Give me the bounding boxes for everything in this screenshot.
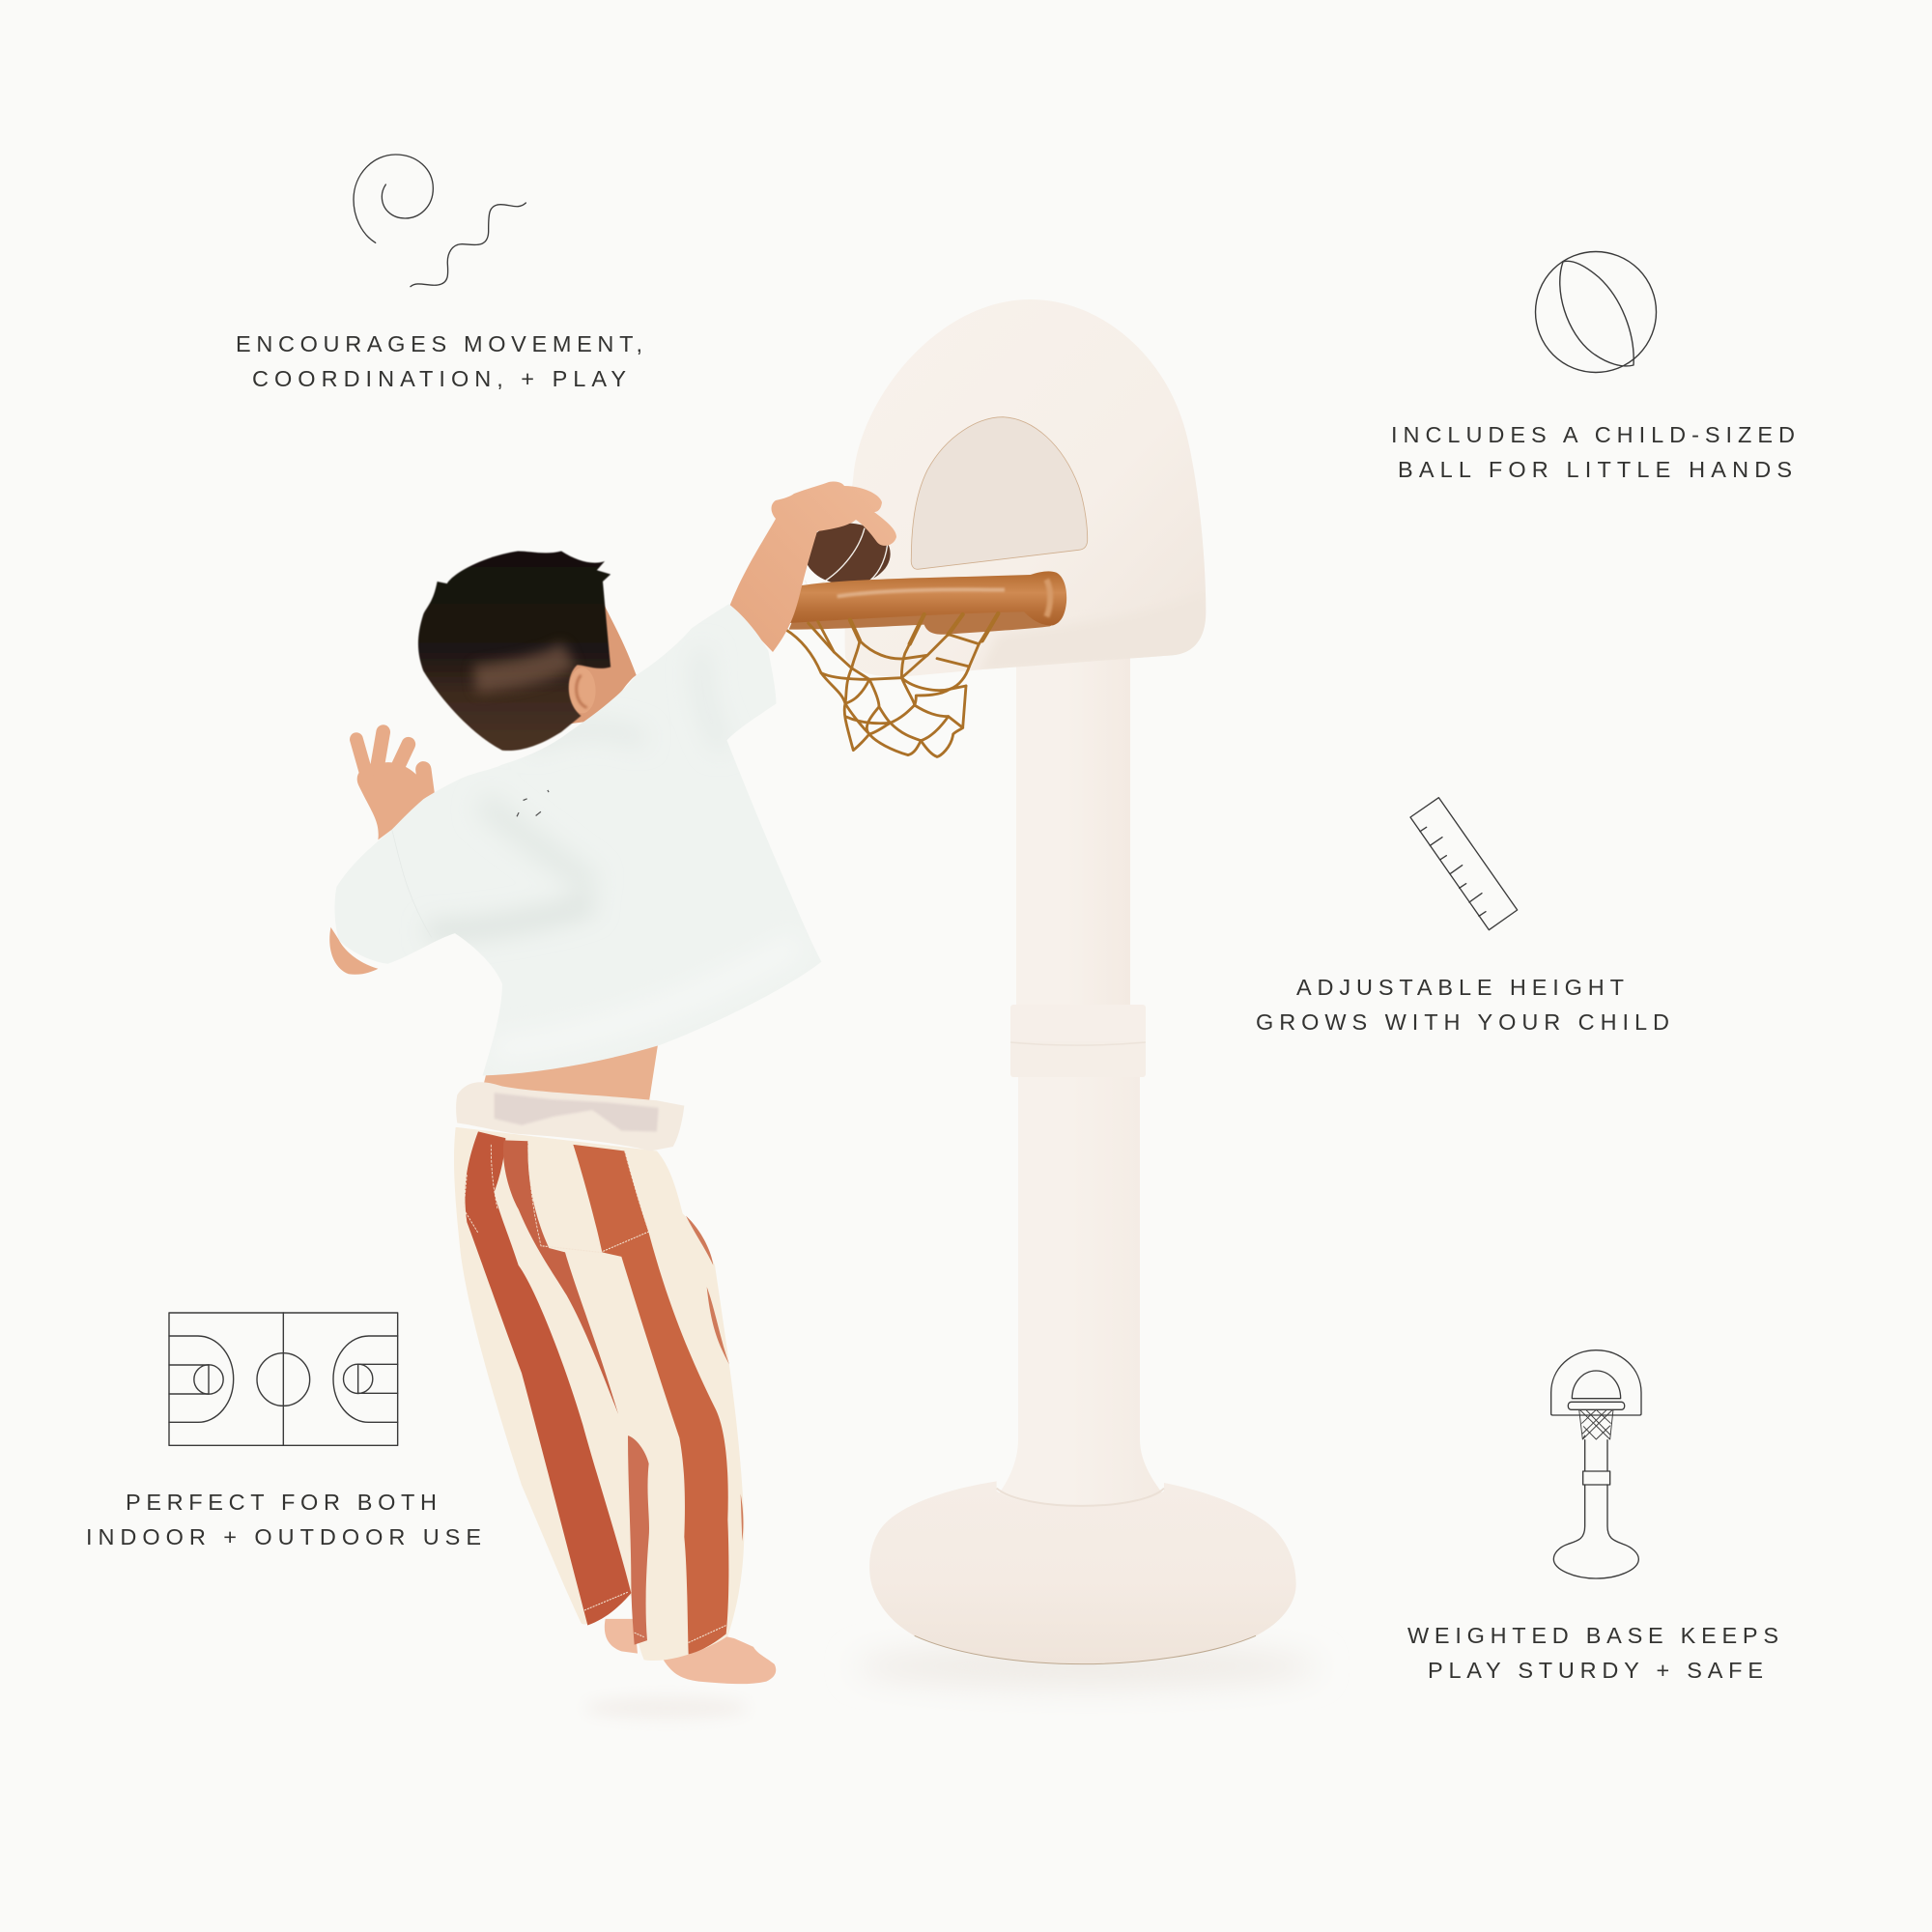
caption (1256, 975, 1669, 1035)
rim (789, 571, 1066, 635)
product: basketball hoop stand (785, 299, 1296, 1664)
icon: ruler (1410, 798, 1518, 930)
caption: COORDINATION, + PLAY (252, 366, 626, 391)
feature: court icon and caption (86, 1313, 481, 1549)
feature: movement squiggle icon and caption (236, 155, 642, 391)
icon: spiral and squiggle (354, 155, 526, 287)
caption: BALL FOR LITTLE HANDS (1398, 457, 1792, 482)
caption: ADJUSTABLE HEIGHT (1296, 975, 1624, 1000)
caption (86, 1490, 481, 1549)
caption: PLAY STURDY + SAFE (1428, 1658, 1763, 1683)
net (785, 613, 998, 756)
t-shirt (335, 604, 821, 1075)
child jumping (329, 481, 896, 1684)
caption: GROWS WITH YOUR CHILD (1256, 1009, 1669, 1035)
caption: INCLUDES A CHILD-SIZED (1391, 422, 1795, 447)
waistband (456, 1082, 684, 1151)
lower pole with flare (991, 1074, 1171, 1512)
caption (236, 331, 642, 391)
icon: basketball court (169, 1313, 398, 1445)
hair (418, 551, 611, 751)
inner panel (911, 417, 1088, 569)
upper pole (1016, 657, 1130, 1009)
icon: ball (1536, 251, 1656, 373)
floor shadow: child (584, 1697, 749, 1719)
floor shadow: hoop base (855, 1645, 1319, 1688)
feature: ruler icon and caption (1256, 798, 1669, 1035)
midriff (483, 1038, 659, 1101)
backboard (845, 299, 1206, 677)
icon: hoop (1551, 1350, 1641, 1578)
caption: INDOOR + OUTDOOR USE (86, 1524, 481, 1549)
height collar (1010, 1005, 1146, 1077)
left hand and arm (329, 732, 427, 975)
raised right arm and hand (729, 481, 896, 652)
ball (805, 524, 891, 584)
feature: ball icon and caption (1391, 251, 1795, 482)
feature: hoop icon and caption (1407, 1350, 1778, 1683)
caption: ENCOURAGES MOVEMENT, (236, 331, 642, 356)
striped pants (454, 1082, 744, 1661)
legs: feet (605, 1619, 776, 1684)
caption (1407, 1623, 1778, 1683)
caption: WEIGHTED BASE KEEPS (1407, 1623, 1778, 1648)
face and neck (561, 602, 637, 724)
caption: PERFECT FOR BOTH (126, 1490, 437, 1515)
caption (1391, 422, 1795, 482)
weighted base (869, 1481, 1296, 1664)
